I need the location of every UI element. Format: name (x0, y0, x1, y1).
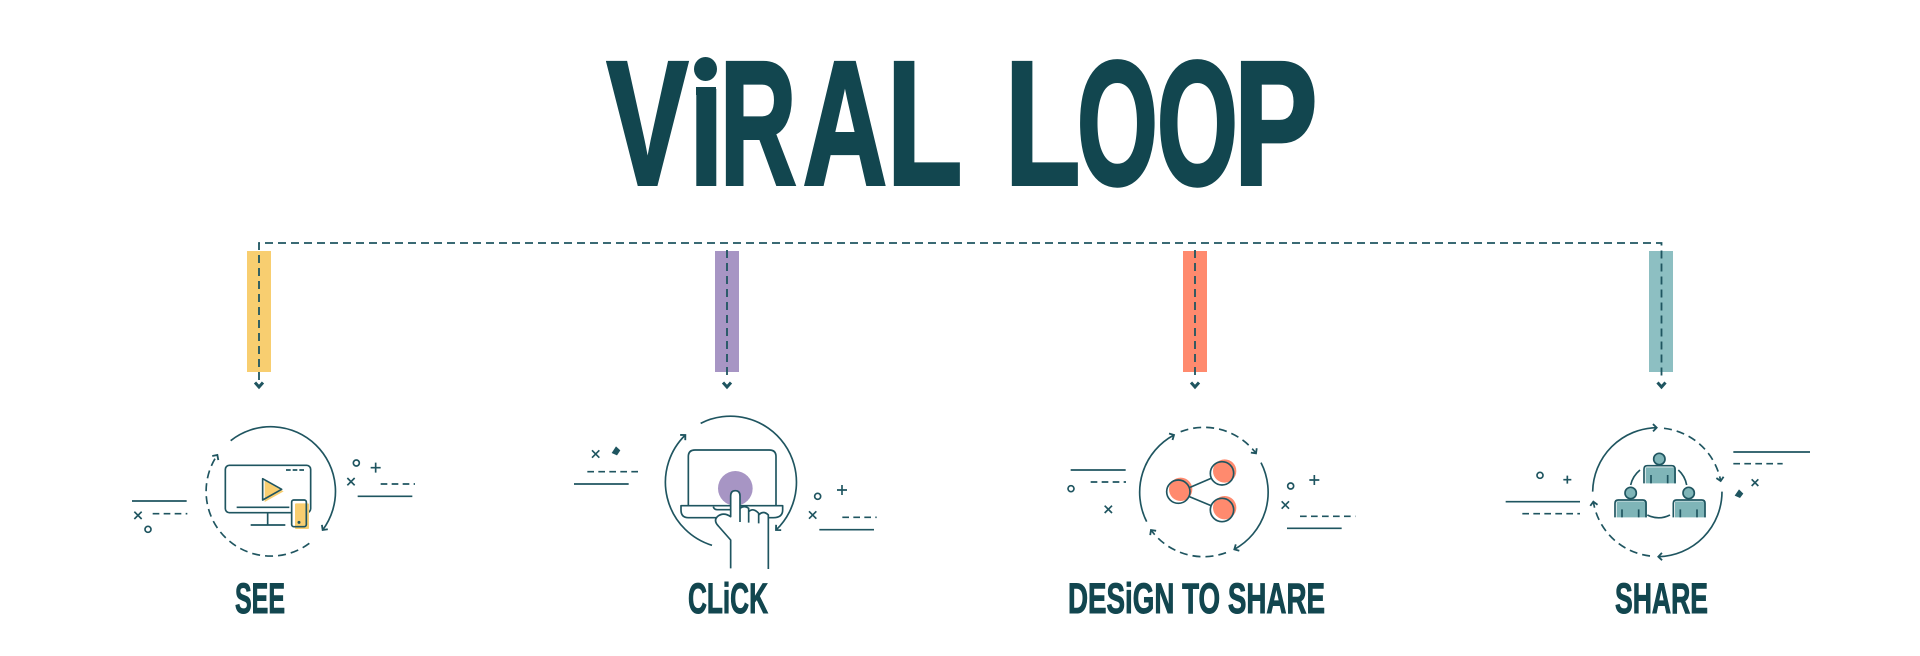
label: click: CLiCK (688, 575, 768, 623)
title (606, 26, 1317, 222)
title: L (887, 26, 962, 222)
icon: laptop with clicking hand (574, 416, 877, 569)
label: share: SHARE (1615, 575, 1708, 623)
panel: click (574, 416, 877, 623)
title: P (1234, 26, 1317, 222)
title: V (607, 26, 688, 222)
title: A (803, 26, 887, 222)
title: O (1157, 26, 1237, 222)
title: L (1005, 26, 1080, 222)
panel: design to share (1068, 427, 1355, 623)
title: R (720, 26, 796, 222)
panel: see (132, 427, 415, 623)
label: see: SEE (235, 575, 285, 623)
title: O (1077, 26, 1157, 222)
icon: share nodes (1068, 427, 1355, 557)
icon: monitor with play button and phone (132, 427, 415, 556)
dashed connector with arrows (255, 243, 1666, 387)
icon: three connected people (1506, 428, 1810, 557)
title: i (688, 26, 723, 222)
panel: share (1506, 428, 1810, 623)
label: design to share: DESiGN TO SHARE (1068, 575, 1325, 623)
color bars (247, 251, 1673, 372)
